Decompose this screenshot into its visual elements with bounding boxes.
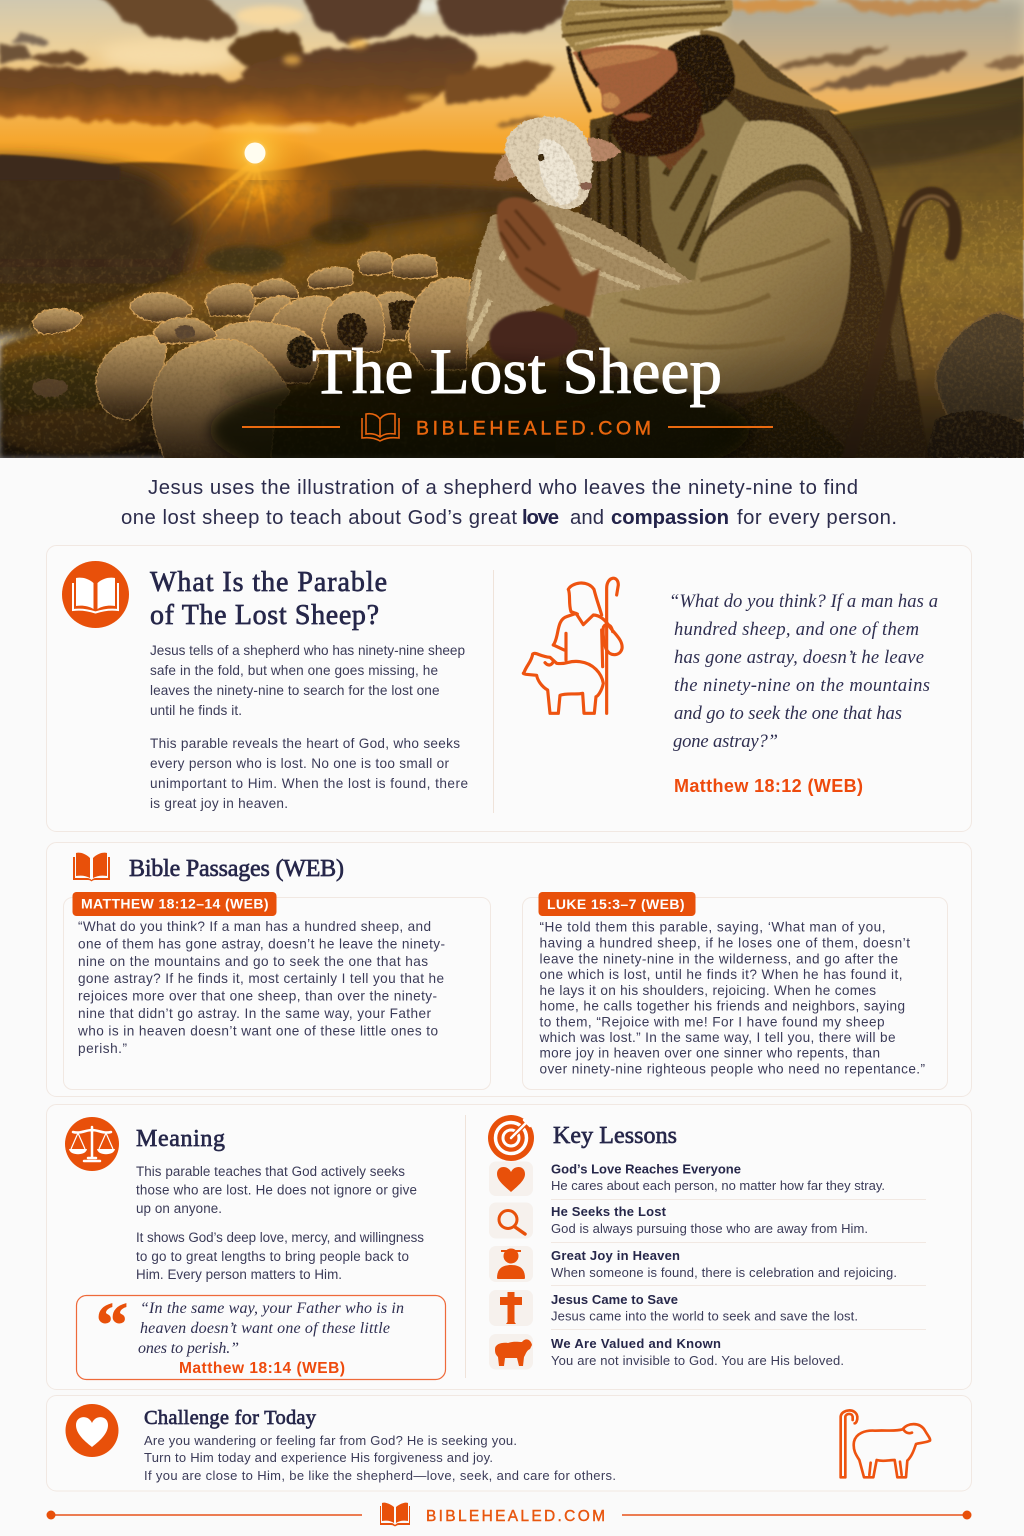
shepherd's crook	[848, 193, 955, 458]
tag: Luke: LUKE 15:3–7 (WEB)	[547, 896, 684, 912]
lesson text: We Are Valued and Known	[551, 1336, 721, 1351]
passage text: Luke: to them, “Rejoice with me! For I have found my sheep	[540, 1014, 884, 1030]
lesson text: He cares about each person, no matter how far they stray.	[551, 1178, 885, 1193]
panel: meaning and key lessons	[46, 1104, 972, 1390]
lesson text: Jesus Came to Save	[551, 1292, 678, 1307]
quote text: ones to perish.”	[138, 1340, 239, 1357]
sky	[0, 0, 1024, 240]
title: The Lost Sheep	[312, 336, 722, 408]
footer brand: BIBLEHEALED.COM	[426, 1508, 605, 1525]
challenge text	[144, 1433, 616, 1483]
lesson: great joy	[489, 1246, 897, 1282]
passage text: Luke: leave the ninety-nine in the wilderness, and go after the	[540, 952, 898, 966]
icon: sheep	[495, 1339, 532, 1366]
lesson text	[551, 1336, 844, 1368]
passage text: Matthew	[77, 919, 445, 1056]
passage text: Luke: which was lost.” In the same way, I tell you, there will be	[538, 1030, 896, 1045]
footer	[46, 1503, 972, 1526]
description text: is great joy in heaven.	[150, 796, 288, 811]
clouds	[0, 0, 1024, 127]
passage card: Matthew	[64, 892, 490, 1090]
description text: every person who is lost. No one is too small or	[150, 756, 449, 771]
icon: quotation mark: “	[96, 1289, 128, 1360]
challenge text: Are you wandering or feeling far from God? He is seeking you.	[144, 1433, 517, 1448]
lesson: god's love	[489, 1162, 885, 1196]
passage text: Matthew: perish.”	[78, 1041, 127, 1056]
quote text	[138, 1300, 404, 1357]
passage text: Matthew: rejoices more over that one sheep, than over the ninety-	[78, 988, 437, 1004]
lesson text: He Seeks the Lost	[551, 1204, 667, 1219]
heading: meaning: Meaning	[136, 1126, 225, 1152]
heading: of The Lost Sheep?	[150, 600, 379, 631]
hero brand row	[242, 414, 773, 441]
icon: open book badge	[62, 561, 129, 628]
description text: safe in the fold, but when one goes missing, he	[150, 663, 438, 678]
scripture quote: and go to seek the one that has	[674, 703, 902, 724]
passage card: Luke	[522, 892, 948, 1090]
icon: footer book	[380, 1503, 410, 1526]
lesson text	[551, 1162, 885, 1193]
passage text: Matthew: nine that didn’t go astray. In the same way, your Father	[78, 1006, 431, 1021]
icon: shepherd with sheep	[523, 578, 622, 713]
tag: Luke	[538, 892, 696, 916]
right end dot	[962, 1510, 972, 1520]
passage text: Matthew: one of them has gone astray, doesn’t he leave the ninety-	[78, 936, 445, 952]
tag: Matthew: MATTHEW 18:12–14 (WEB)	[81, 896, 268, 912]
intro text	[121, 477, 897, 529]
distant hills	[0, 145, 582, 348]
scripture quote: “What do you think? If a man has a	[669, 591, 938, 612]
scripture quote	[669, 591, 938, 752]
lesson text: Great Joy in Heaven	[551, 1248, 680, 1263]
icon: heart badge	[66, 1404, 118, 1457]
lower title shade	[0, 346, 1024, 458]
right hillside	[800, 76, 1024, 458]
quote text: heaven doesn’t want one of these little	[140, 1320, 390, 1337]
meaning text: those who are lost. He does not ignore or give	[136, 1182, 417, 1198]
heading	[150, 567, 387, 631]
icon: open book outline	[362, 414, 399, 441]
intro text: love	[522, 507, 559, 529]
passage text: Luke	[538, 920, 925, 1076]
panel: bible passages	[46, 842, 972, 1096]
heading: Challenge for Today	[144, 1407, 317, 1429]
meaning text: Him. Every person matters to Him.	[136, 1267, 342, 1282]
description text: unimportant to Him. When the lost is found, there	[150, 776, 468, 791]
icon: cross	[500, 1292, 522, 1324]
intro text: one lost sheep to teach about God’s great	[121, 507, 517, 529]
intro text: compassion	[611, 507, 729, 529]
passage text: Luke: over ninety-nine righteous people who need no repentance.”	[540, 1062, 925, 1076]
lesson text: God is always pursuing those who are away from Him.	[551, 1221, 868, 1236]
rocks	[925, 312, 1024, 458]
passage text: Matthew: nine on the mountains and go to seek the one that has	[78, 954, 428, 969]
icon: filled book	[73, 853, 110, 882]
scripture quote: the ninety-nine on the mountains	[674, 675, 930, 696]
meaning text: up on anyone.	[136, 1201, 222, 1216]
quote reference: Matthew 18:14 (WEB)	[179, 1360, 345, 1377]
passage text: Matthew: “What do you think? If a man has a hundred sheep, and	[78, 919, 431, 934]
intro text: for every person.	[737, 507, 897, 529]
description text: This parable reveals the heart of God, who seeks	[150, 736, 460, 751]
hero banner	[0, 0, 1024, 492]
icon: crook and sheep	[841, 1410, 930, 1477]
panel: challenge for today	[46, 1396, 972, 1491]
flock of sheep	[32, 252, 470, 470]
scripture quote: hundred sheep, and one of them	[674, 619, 919, 640]
heading: key lessons: Key Lessons	[553, 1123, 677, 1149]
meaning text	[136, 1164, 424, 1282]
lesson text: God’s Love Reaches Everyone	[551, 1162, 741, 1176]
meaning text: This parable teaches that God actively seeks	[136, 1164, 405, 1179]
quote callout	[76, 1289, 446, 1380]
heading: What Is the Parable	[150, 567, 387, 598]
lesson text	[551, 1292, 858, 1324]
meaning text: to go to great lengths to bring people back to	[136, 1249, 409, 1264]
lesson: jesus came	[489, 1290, 858, 1326]
intro text: Jesus uses the illustration of a shepherd who leaves the ninety-nine to find	[148, 477, 858, 499]
lamb	[466, 117, 692, 358]
lesson text: You are not invisible to God. You are His beloved.	[551, 1353, 844, 1368]
quote text: “In the same way, your Father who is in	[140, 1300, 404, 1317]
shepherd figure	[555, 0, 928, 458]
passage text: Luke: “He told them this parable, saying, ‘What man of you,	[540, 920, 886, 934]
lesson text	[551, 1204, 868, 1236]
lesson text	[551, 1248, 897, 1280]
challenge text: Turn to Him today and experience His forgiveness and joy.	[144, 1450, 493, 1465]
passage text: Matthew: gone astray? If he finds it, most certainly I tell you that he	[78, 971, 444, 986]
description text: leaves the ninety-nine to search for the lost one	[150, 683, 440, 698]
heading: Bible Passages (WEB)	[129, 856, 344, 882]
lesson: seeks the lost	[489, 1202, 868, 1238]
passage text: Luke: having a hundred sheep, if he loses one of them, doesn’t	[540, 936, 910, 950]
passage text: Luke: home, he calls together his friends and neighbors, saying	[540, 998, 905, 1014]
lit cloud edges	[220, 39, 434, 132]
scripture reference: Matthew 18:12 (WEB)	[674, 776, 863, 796]
hero brand row: BIBLEHEALED.COM	[416, 418, 651, 440]
intro text: and	[570, 507, 604, 529]
icon: magnifying glass	[499, 1210, 525, 1234]
passage text: Luke: he lays it on his shoulders, rejoicing. When he comes	[540, 983, 876, 998]
icon: heart	[497, 1167, 525, 1192]
lesson text: When someone is found, there is celebration and rejoicing.	[551, 1265, 897, 1280]
challenge text: If you are close to Him, be like the shepherd—love, seek, and care for others.	[144, 1468, 616, 1483]
scripture quote: gone astray?”	[673, 731, 778, 752]
tag: Matthew	[72, 892, 276, 916]
meaning text: It shows God’s deep love, mercy, and willingness	[136, 1230, 424, 1245]
sun	[206, 102, 304, 196]
panel: what is the parable	[46, 546, 972, 832]
description text: Jesus tells of a shepherd who has ninety-nine sheep	[150, 643, 465, 658]
passage text: Luke: more joy in heaven over one sinner who repents, than	[540, 1046, 880, 1060]
lesson text: Jesus came into the world to seek and save the lost.	[551, 1308, 858, 1324]
description text	[150, 643, 468, 811]
passage text: Matthew: who is in heaven doesn’t want one of these little ones to	[77, 1024, 438, 1038]
icon: person	[497, 1248, 525, 1279]
passage text: Luke: one which is lost, until he finds it? When he has found it,	[540, 967, 902, 982]
icon: scales badge	[65, 1117, 119, 1171]
scripture quote: has gone astray, doesn’t he leave	[674, 647, 924, 668]
left end dot	[46, 1510, 56, 1520]
description text: until he finds it.	[150, 703, 242, 718]
meadow	[0, 180, 830, 458]
lesson: valued and known	[489, 1334, 844, 1370]
icon: target badge	[488, 1115, 534, 1161]
hands	[489, 197, 600, 362]
